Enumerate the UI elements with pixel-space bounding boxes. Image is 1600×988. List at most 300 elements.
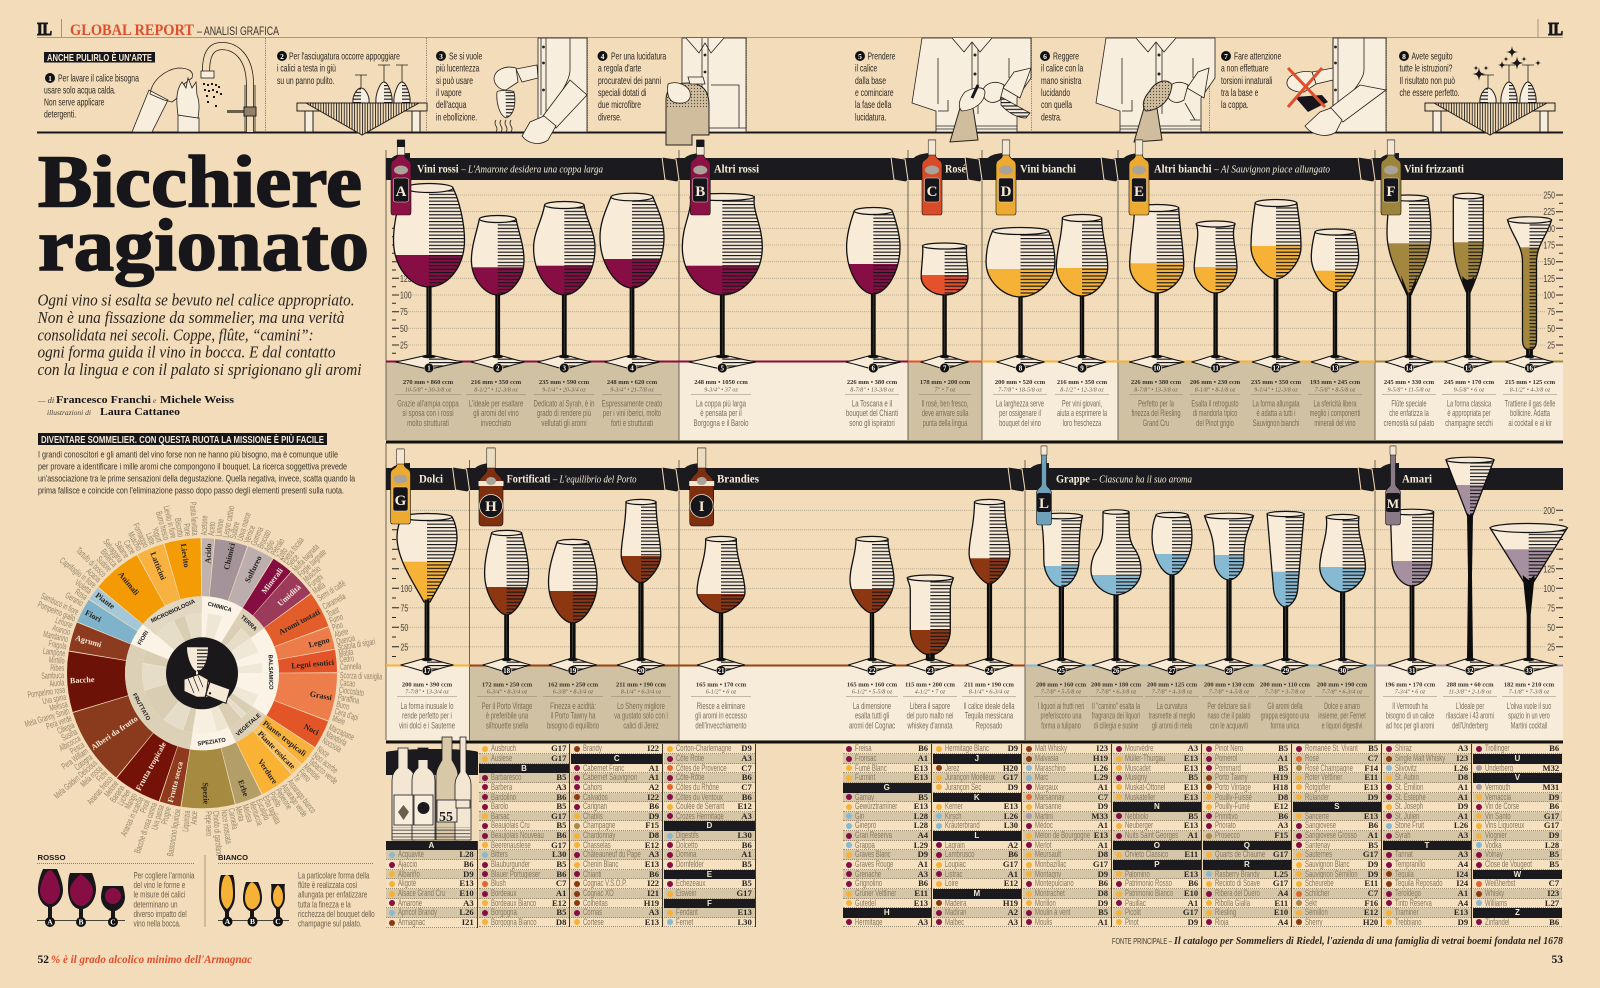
byline: — di — [37, 395, 55, 405]
wheel flavour family labels: Erbe — [236, 779, 251, 798]
index column 12: U — [1514, 754, 1520, 763]
index column 8: O — [1154, 841, 1160, 850]
caption glass 26: fragranza dei liquori — [1092, 710, 1140, 721]
caption glass 24: 211 mm • 190 ccm — [964, 682, 1015, 688]
wheel aromas left half: Lampone — [42, 645, 66, 659]
caption glass 12: 235 mm • 350 ccm — [1251, 379, 1302, 386]
wheel aromas left half: Pompelmo rosa — [27, 684, 66, 700]
caption glass 25: forma a tulipano — [1041, 720, 1081, 731]
glass 4 — [599, 192, 665, 373]
index column 4: D — [707, 821, 712, 830]
step 3 text: più lucentezza — [436, 62, 480, 74]
caption glass 14: Flûte speciale — [1391, 398, 1427, 409]
wheel aromas left half: Mela Granny Smith — [23, 706, 71, 729]
glass 22: 22 — [868, 667, 876, 675]
bottle F: F — [1386, 184, 1396, 200]
wheel aromas right half: Selce — [284, 552, 301, 569]
chart row 1 right scale: 25 — [1547, 339, 1555, 351]
caption glass 2: L'ideale per esaltare — [469, 398, 523, 409]
chart row 1 right scale: 75 — [1547, 306, 1555, 318]
caption glass 4: per i vini iberici, molto — [603, 408, 661, 418]
caption glass 24: Tequila messicana — [965, 710, 1014, 721]
wheel flavour family labels: Lievito — [179, 543, 191, 568]
wheel aromas right half: Erba tagliata — [260, 794, 284, 826]
glass 27 — [1148, 512, 1196, 676]
glass 2: 2 — [496, 364, 500, 372]
step 2 text: su un panno pulito. — [277, 75, 334, 86]
caption glass 8: 200 mm • 520 ccm — [995, 379, 1046, 386]
wheel aromas left half: Mela Golden Delicious — [52, 757, 100, 801]
glass 29 — [1262, 510, 1309, 676]
chart row 2 right scale — [1543, 505, 1563, 656]
glass 25: 25 — [1058, 667, 1065, 675]
caption glass 4: forti e strutturati — [611, 418, 653, 428]
wheel aromas left half: Limone — [54, 615, 74, 631]
step 1 text: detergenti. — [44, 108, 76, 120]
footer right: source: FONTE PRINCIPALE – — [1112, 936, 1172, 946]
glass 28: 28 — [1226, 667, 1233, 675]
glass 3: 3 — [563, 364, 567, 372]
chart row 1 right scale: 50 — [1547, 323, 1555, 334]
wheel aromas right half: Aceto — [206, 521, 218, 536]
caption glass 18: 6-3/4" • 8-3/4 oz — [487, 690, 528, 696]
index column 4: E — [707, 870, 712, 879]
bottle E: E — [1134, 184, 1144, 200]
step 7 text: 7 — [1224, 52, 1228, 61]
glass 21: 21 — [718, 667, 725, 675]
step 4 illustration: microfibre cloths — [666, 38, 746, 145]
caption glass 23: 115 mm • 200 ccm — [905, 682, 956, 688]
caption glass 25: preferiscono una — [1040, 710, 1082, 721]
step 8 text: 8 — [1402, 52, 1406, 61]
wheel aromas right half: Muffa bagnata — [290, 541, 322, 574]
caption glass 9: loro freschezza — [1063, 418, 1102, 428]
wheel aromas left half: Pesca — [68, 739, 87, 756]
index column 11: T — [1424, 841, 1429, 850]
wheel flavour family labels: Grassi — [309, 689, 333, 702]
index column 11 — [1383, 744, 1472, 927]
wheel aromas right half: Cioccolato — [338, 684, 365, 698]
wheel flavour family labels: Spezie — [201, 782, 211, 805]
step 3 illustration: steam and shirt — [494, 38, 587, 143]
caption glass 9: aiuta a esprimere la — [1057, 408, 1108, 418]
chart row 2 left scale — [392, 530, 412, 656]
caption glass 17: rende perfetto per i — [402, 710, 452, 721]
wheel aromas right half: Marzapane — [327, 722, 356, 743]
wheel aromas left half: Muschio — [126, 530, 145, 553]
wheel flavour family labels: Solfureo — [243, 554, 264, 584]
caption glass 23: Libera il sapore — [910, 701, 950, 711]
step 6 text: 6 — [1043, 52, 1047, 61]
wheel aromas right half: Cannella — [340, 661, 362, 672]
step 8 text: Il risultato non può — [1400, 75, 1455, 86]
step heading box: ANCHE PULIRLO È UN'ARTE — [47, 51, 152, 64]
wheel aromas left half: Salame — [113, 539, 132, 560]
caption glass 21: dell'invecchiamento — [695, 720, 747, 731]
chart row 2 backgrounds — [386, 443, 1563, 742]
caption glass 9: 8-1/2" • 12-3/8 oz — [1060, 387, 1104, 393]
section title: Dolci: Dolci — [419, 472, 444, 486]
caption glass 13: 193 mm • 245 ccm — [1310, 379, 1361, 386]
wheel aromas right half: Foglie bagnate — [295, 547, 329, 579]
wheel aromas left half: Pera verde — [45, 713, 73, 732]
wheel aromas right half: Fumo — [328, 611, 345, 626]
glass 26: 26 — [1112, 667, 1120, 675]
glass 3 — [532, 200, 596, 373]
glass 32 — [1445, 456, 1495, 676]
wheel category labels: CHIMICA — [207, 602, 233, 614]
red glass C: C — [110, 918, 116, 927]
wheel aromas right half: Pietra focaia — [279, 534, 307, 565]
step 8 illustration: gleaming glasses — [1425, 46, 1555, 135]
wheel category labels: TERRA — [239, 615, 258, 633]
bottle I — [689, 448, 714, 526]
step 7 text: torsioni innaturali — [1221, 75, 1272, 86]
caption glass 9: Per vini giovani, — [1062, 398, 1102, 409]
caption glass 18: è preferibile una — [486, 710, 529, 721]
white text: champagne sul palato. — [298, 918, 362, 929]
glass 19 — [548, 538, 598, 676]
step 4 text: 4 — [601, 52, 605, 61]
wheel aromas left half: Biscotto — [172, 517, 186, 538]
chart row 2 right scale: 25 — [1547, 641, 1555, 653]
wheel flavour family labels: Umidità — [276, 583, 303, 608]
step 7 text: la coppa. — [1221, 99, 1249, 110]
glass 19: 19 — [569, 667, 577, 675]
caption glass 25: 200 mm • 160 ccm — [1036, 682, 1087, 688]
wheel aromas left half: Ribes — [50, 662, 64, 673]
caption glass 5: 248 mm • 1050 ccm — [694, 379, 748, 386]
index column 6: K — [974, 792, 980, 802]
white text — [298, 870, 375, 929]
wheel flavour family labels: Piante essicate — [256, 729, 297, 771]
wheel aromas left half: Tartufo di bosco — [74, 545, 109, 579]
caption glass 2 — [466, 379, 526, 428]
caption glass 12: 9-1/4" • 12-3/8 oz — [1254, 387, 1298, 393]
glass 6: 6 — [872, 364, 876, 372]
wheel aromas left half: Melissa — [48, 698, 69, 713]
index column 3 — [571, 744, 663, 927]
step 6 text: lucidando — [1041, 87, 1070, 98]
step 5 text: dalla base — [855, 75, 886, 86]
step 3 text: si può usare — [436, 75, 473, 86]
glass 30 — [1318, 514, 1367, 676]
caption glass 28: naso che il palato — [1208, 710, 1250, 721]
glass 23: 23 — [927, 667, 934, 675]
step 2 illustration: glasses on table — [297, 65, 427, 135]
chart row 1 backgrounds — [386, 150, 1563, 442]
section title: Amari: Amari — [1402, 472, 1433, 486]
main title — [38, 142, 369, 287]
step 2 text — [277, 50, 400, 86]
chart row 2 right scale: 75 — [1547, 602, 1555, 614]
step 8 text — [1399, 50, 1460, 98]
step 2 text: 2 — [280, 52, 284, 61]
caption glass 1: 270 mm • 860 ccm — [403, 379, 454, 386]
glass 17: 17 — [424, 667, 431, 675]
wheel aromas right half: Noce moscata — [219, 809, 234, 845]
step 7 text: tra la base e — [1221, 87, 1259, 98]
glass 10: 10 — [1153, 364, 1161, 372]
wheel category labels: MICROBIOLOGIA — [150, 598, 197, 625]
red glass C — [101, 886, 125, 927]
step 7 text: Fare attenzione — [1234, 50, 1281, 62]
caption glass 17: vini dolci e i Sauterne — [399, 720, 455, 731]
index column 8: P — [1154, 860, 1160, 869]
wheel aromas right half: Malta — [310, 579, 328, 596]
step 8 text: che essere perfetto. — [1400, 87, 1460, 98]
wheel flavour family labels: Agrumi — [74, 633, 103, 649]
caption glass 33: Martini cocktail — [1511, 720, 1547, 731]
glass 30: 30 — [1339, 667, 1347, 675]
caption glass 3: vellutati gli aromi — [541, 418, 587, 428]
chart row 2 left scale: 75 — [400, 602, 408, 614]
caption glass 28: 200 mm • 130 ccm — [1204, 682, 1255, 688]
index column 3: C — [614, 754, 620, 763]
index column 9 — [1203, 744, 1292, 927]
title line 1: Bicchiere — [38, 142, 362, 224]
wheel aromas right half: Muschio — [301, 563, 323, 585]
wheel aromas left half: Rosa — [73, 586, 90, 603]
step 5 text: 5 — [858, 52, 862, 61]
glass 25 — [1037, 512, 1086, 676]
white glass A: A — [225, 917, 231, 926]
index column 9: Q — [1244, 841, 1250, 850]
wheel aromas left half: Pasta lievitata — [188, 502, 201, 536]
wheel aromas right half: Legno cattivo — [220, 505, 237, 538]
caption glass 6: bouquet del Chianti — [846, 408, 898, 418]
wheel aromas right half: Scatola di sigari — [337, 636, 376, 653]
glass 13 — [1310, 228, 1360, 373]
caption glass 25 — [1034, 682, 1088, 731]
index column 4 — [664, 744, 756, 927]
caption glass 9: 216 mm • 350 ccm — [1057, 379, 1108, 386]
caption glass 26 — [1089, 682, 1143, 731]
caption glass 7: punta della lingua — [923, 418, 968, 428]
index column 6 — [932, 744, 1022, 927]
index column 6: M — [973, 889, 980, 898]
step 6 text: con quella — [1041, 99, 1072, 110]
caption glass 14: 245 mm • 330 ccm — [1384, 379, 1435, 386]
index column 2: B — [521, 764, 527, 773]
step 3 text: il vapore — [436, 87, 462, 98]
step 4 text — [598, 50, 666, 123]
caption glass 21: 165 mm • 170 ccm — [696, 682, 747, 688]
chart row 1 right scale — [1543, 189, 1563, 353]
step 8 text: tutte le istruzioni? — [1400, 62, 1453, 74]
caption glass 31: 196 mm • 170 ccm — [1385, 682, 1436, 688]
wheel aromas right half: Semi di caffè — [315, 578, 347, 603]
caption glass 7: 7" • 7 oz — [935, 387, 956, 393]
captions row 1 — [395, 379, 1557, 428]
wheel aromas left half: Sambuca — [41, 670, 65, 681]
wheel aromas right half: Eucalipto — [254, 797, 272, 822]
chart row 2 left scale: 25 — [400, 641, 408, 653]
caption glass 19: 6-3/8" • 8-3/4 oz — [553, 690, 594, 696]
caption glass 4 — [602, 379, 662, 428]
wheel aromas right half: Fieno — [296, 767, 313, 784]
step 4 text: speciali dotati di — [598, 87, 646, 98]
glass 5 — [682, 192, 763, 373]
glass 17 — [396, 512, 458, 676]
glass 8 — [985, 226, 1056, 373]
glass 28 — [1204, 512, 1254, 676]
caption glass 20: calici di Jerez — [623, 720, 659, 731]
caption glass 8 — [993, 379, 1047, 428]
index column 1: A — [428, 841, 434, 850]
chart row 1 right scale: 250 — [1543, 189, 1555, 201]
bottle B: B — [695, 184, 705, 200]
white glass C — [271, 884, 285, 926]
caption glass 20: Lo Sherry migliore — [617, 701, 665, 711]
wheel category band — [134, 605, 270, 742]
caption glass 31 — [1383, 682, 1437, 731]
bottle F — [1381, 140, 1401, 215]
glass 29: 29 — [1282, 667, 1290, 675]
glass 26 — [1090, 509, 1142, 676]
caption glass 7 — [919, 379, 971, 428]
bottle H: H — [485, 499, 497, 515]
wheel aromas right half: Zolfo — [274, 546, 290, 562]
caption glass 29: grappa esigono una — [1261, 710, 1310, 721]
wheel flavour family labels: Frutta tropicale — [134, 740, 168, 792]
step 1 text: Per lavare il calice bisogna — [58, 72, 139, 84]
wheel aromas left half: Mela rossa — [78, 763, 105, 789]
wheel flavour family labels: Piante — [94, 591, 117, 611]
wheel flavour family labels: Minerali — [260, 566, 285, 596]
caption glass 18: 172 mm • 250 ccm — [482, 682, 533, 688]
wheel aromas left half: Fichi — [94, 768, 110, 784]
caption glass 12: è adatta a tutti i — [1257, 408, 1296, 418]
chart row 1 right scale: 225 — [1543, 206, 1555, 218]
red heading: ROSSO — [38, 853, 66, 862]
step heading box — [44, 51, 155, 64]
caption glass 29 — [1258, 682, 1312, 731]
caption glass 13 — [1308, 379, 1362, 428]
caption glass 14: cremosità sul palato — [1384, 418, 1434, 428]
caption glass 9 — [1055, 379, 1109, 428]
caption glass 29: Gli aromi della — [1267, 701, 1303, 711]
caption glass 6: 8-7/8" • 13-3/8 oz — [850, 387, 894, 393]
wheel aromas right half: Limone — [213, 518, 226, 537]
page number: 53 — [1552, 954, 1563, 966]
caption glass 31: ad hoc per gli aromi — [1386, 720, 1434, 731]
caption glass 17: 200 mm • 390 ccm — [402, 682, 453, 688]
caption glass 17 — [397, 682, 457, 731]
index column 9: R — [1244, 860, 1250, 869]
caption glass 5: 9-3/4" • 37 oz — [704, 387, 738, 393]
caption glass 24 — [962, 682, 1016, 731]
caption glass 21: 6-1/2" • 6 oz — [706, 690, 737, 696]
glass 11: 11 — [1212, 364, 1219, 372]
index column 12 — [1473, 744, 1562, 927]
caption glass 24: Il calice ideale della — [963, 701, 1015, 711]
chart row 1 right scale: 200 — [1543, 223, 1555, 234]
caption glass 27 — [1145, 682, 1199, 731]
wheel flavour family labels — [70, 542, 335, 805]
byline — [37, 394, 235, 418]
step 5 text: lucidatura. — [855, 111, 886, 123]
wheel aromas left half: Prugne — [159, 806, 173, 825]
bottle M — [1386, 446, 1400, 525]
step 8 text: Avete seguito — [1412, 50, 1453, 62]
glass 15: 15 — [1465, 364, 1472, 372]
chart row 1 ribbon — [386, 153, 1563, 182]
step 3 text: dell'acqua — [436, 99, 467, 110]
wheel aromas right half: Toast — [325, 604, 341, 619]
caption glass 19: 162 mm • 250 ccm — [548, 682, 599, 688]
index column 10: S — [1334, 802, 1340, 811]
wheel aromas left half: Pane — [181, 523, 194, 537]
caption glass 1: si sposa con i rossi — [402, 408, 454, 418]
caption glass 6: La Toscana e il — [852, 398, 892, 409]
wheel aromas left half: Susina — [59, 726, 80, 743]
wheel category labels: VEGETALE — [235, 713, 262, 738]
step 4 text: a regola d'arte — [598, 62, 641, 74]
step 2 text: i calici a testa in giù — [277, 62, 336, 74]
red glass B — [68, 873, 96, 927]
wheel aromas left half: Anice — [188, 811, 200, 825]
caption glass 18 — [477, 682, 537, 731]
caption glass 19: Finezza e acidità: — [550, 701, 596, 711]
caption glass 20: 8-1/4" • 6-3/4 oz — [621, 690, 662, 696]
wheel flavour family labels: Frutta secca — [166, 761, 185, 804]
caption glass 32 — [1443, 682, 1497, 731]
caption glass 4: Espressamente creato — [602, 398, 662, 409]
wheel aromas right half: Melissa — [240, 803, 256, 824]
wheel aromas right half: Mentolo — [301, 761, 323, 782]
wheel aromas right half: Bruciato — [255, 528, 273, 550]
step 3 text: in ebollizione. — [436, 111, 477, 123]
red text: Per cogliere l'armonia — [134, 870, 195, 881]
red glass A — [38, 869, 63, 927]
glass 9: 9 — [1080, 364, 1084, 372]
wheel aromas left half: Uva passa — [149, 803, 166, 831]
step 2 text: Per l'asciugatura occorre appoggiare — [289, 50, 400, 62]
caption glass 12: Sauvignon bianchi — [1253, 418, 1299, 428]
step 5 text — [855, 50, 896, 123]
index column 6: L — [974, 831, 979, 840]
wheel aromas right half: Burro — [335, 698, 351, 712]
chart row 2 left scale: 50 — [400, 622, 408, 633]
caption glass 26: 200 mm • 180 ccm — [1091, 682, 1142, 688]
caption glass 6 — [845, 379, 899, 428]
section name: GLOBAL REPORT — [70, 22, 195, 39]
wheel aromas right half: Pisello — [267, 790, 284, 809]
white glass A — [219, 875, 235, 926]
section title: Altri bianchi: Altri bianchi – Al Sauvignon piace allungato — [1154, 162, 1330, 176]
section title: Brandies: Brandies — [717, 472, 759, 486]
caption glass 10: 226 mm • 380 ccm — [1131, 379, 1182, 386]
publication logo right: IL — [1548, 19, 1563, 39]
wheel aromas left half: Formaggio — [131, 521, 151, 549]
caption glass 3: Dedicato al Syrah, è in — [534, 398, 594, 409]
caption glass 7: Il rosé, ben fresco, — [922, 398, 968, 409]
wheel flavour family labels: Chimici — [222, 542, 237, 571]
wheel aromas right half: Chiodo di garofano — [210, 810, 225, 856]
glass 7 — [920, 242, 969, 373]
wheel aromas right half: Mandorla — [324, 728, 349, 749]
index column 7 — [1022, 744, 1112, 927]
chart row 2 right scale: 100 — [1543, 583, 1555, 594]
wheel flavour family labels: Acido — [203, 543, 213, 564]
wheel flavour family labels: Fiori — [84, 608, 103, 624]
caption glass 5: La coppa più larga — [696, 398, 746, 409]
wheel aromas left half: Pera William — [59, 745, 90, 772]
index column 12: W — [1514, 870, 1521, 879]
caption glass 22: 6-1/2" • 5-5/8 oz — [852, 690, 893, 696]
bottle C: C — [927, 184, 937, 200]
